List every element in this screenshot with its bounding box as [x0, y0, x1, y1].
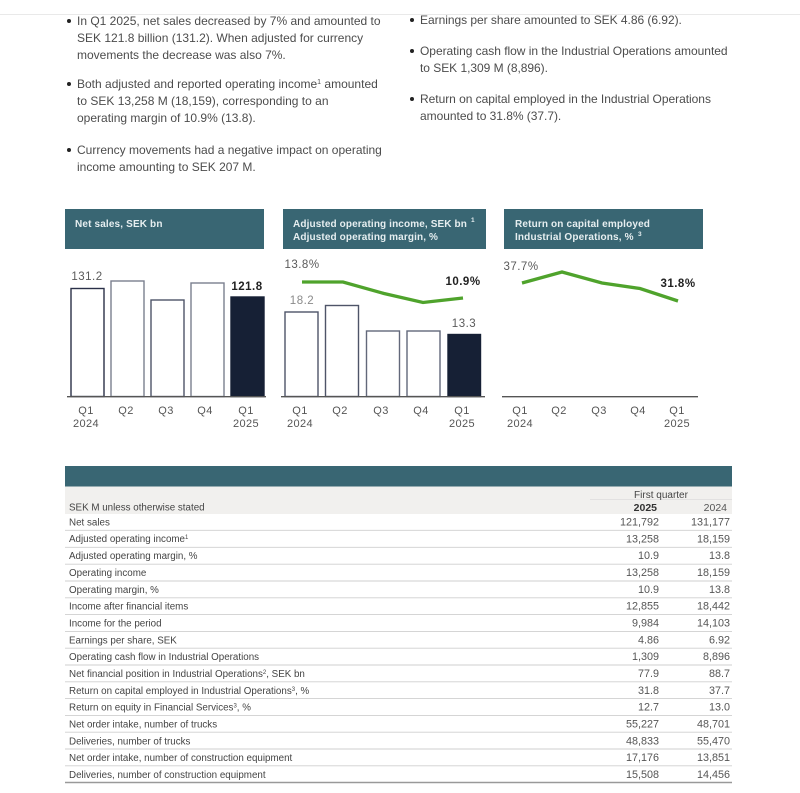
- column 2024 values: 18,159: [697, 567, 730, 579]
- axis labels: net sales: Q4: [197, 405, 213, 417]
- chart: adjusted operating income: [281, 209, 486, 430]
- row labels: [69, 518, 310, 781]
- axis labels: return on capital employed: Q2: [551, 405, 567, 417]
- row labels: Return on equity in Financial Services: [69, 702, 233, 714]
- value labels: return on capital employed: [503, 261, 696, 290]
- chart header: net sales: Net sales, SEK bn: [75, 219, 163, 230]
- bullet: return on capital: [420, 91, 711, 125]
- column 2025 values: 12.7: [638, 702, 659, 714]
- axis labels: return on capital employed: Q1: [669, 405, 685, 417]
- axis labels: adjusted operating income: 2025: [449, 418, 475, 430]
- bullet: net sales: movements the decrease was also 7%.: [77, 48, 286, 62]
- chart: return on capital employed: [502, 209, 703, 430]
- column 2025 values: 10.9: [638, 584, 659, 596]
- column 2025 values: 31.8: [638, 685, 659, 697]
- column 2024 values: 14,103: [697, 618, 730, 630]
- axis labels: return on capital employed: [507, 405, 690, 430]
- column 2024 values: 88.7: [709, 668, 730, 680]
- row labels: Net order intake, number of trucks: [69, 720, 217, 730]
- row labels: 2: [263, 670, 267, 676]
- row labels: Income after financial items: [69, 602, 188, 612]
- column 2024 values: 14,456: [697, 769, 730, 781]
- column 2025 values: 13,258: [626, 567, 659, 579]
- axis labels: return on capital employed: Q3: [591, 405, 607, 417]
- table title bar: [65, 466, 732, 486]
- bullet: cash flow: Operating cash flow in the Industrial Operations amounted: [420, 44, 728, 58]
- chart: net sales: [65, 209, 266, 430]
- column 2024 values: 18,159: [697, 534, 730, 546]
- row lines: [65, 530, 732, 782]
- value labels: adjusted operating income: 10.9%: [445, 276, 481, 288]
- column 2024 values: 55,470: [697, 736, 730, 748]
- bullet: operating income: Both adjusted and reported operating income1 amounted: [77, 77, 378, 91]
- column 2024 values: 13.0: [709, 702, 730, 714]
- axis labels: return on capital employed: Q1: [512, 405, 528, 417]
- row labels: Deliveries, number of trucks: [69, 736, 191, 748]
- chart header: net sales: [65, 209, 264, 249]
- column 2025 values: [620, 516, 659, 781]
- column 2025 values: 10.9: [638, 550, 659, 562]
- chart header: adjusted operating income: [283, 209, 486, 249]
- row labels: , SEK bn: [266, 669, 305, 680]
- chart header: adjusted operating income: Adjusted operating margin, %: [293, 232, 438, 243]
- bullet: currency: income amounting to SEK 207 M.: [77, 160, 256, 174]
- chart header: return on capital employed: Industrial Operations, %: [515, 232, 634, 243]
- column 2025 values: 13,258: [626, 534, 659, 546]
- column 2025 values: 17,176: [626, 752, 659, 764]
- column 2024 values: 8,896: [703, 651, 730, 663]
- axis labels: adjusted operating income: [287, 405, 475, 430]
- chart header: adjusted operating income: 1: [471, 217, 475, 224]
- row labels: , %: [237, 702, 251, 714]
- bars: net sales: [71, 281, 264, 396]
- value labels: adjusted operating income: 13.3: [452, 318, 476, 330]
- bullet: currency: Currency movements had a negative impact on operating: [77, 143, 382, 157]
- axis labels: adjusted operating income: Q4: [413, 405, 429, 417]
- row labels: Net financial position in Industrial Operations: [69, 669, 263, 680]
- column 2024 values: 13.8: [709, 584, 730, 596]
- column 2024 values: 48,701: [697, 718, 730, 730]
- axis labels: adjusted operating income: Q2: [332, 405, 348, 417]
- bullet: net sales: [77, 12, 381, 64]
- column 2025 values: 4.86: [638, 634, 659, 646]
- column 2024 values: 18,442: [697, 600, 730, 612]
- top rule: [0, 14, 800, 15]
- axis labels: net sales: Q2: [118, 405, 134, 417]
- axis labels: net sales: [73, 405, 259, 430]
- column 2024 values: 13,851: [697, 752, 730, 764]
- bars: adjusted operating income: [285, 306, 480, 396]
- row labels: , %: [295, 686, 310, 697]
- column 2025 values: 77.9: [638, 668, 659, 680]
- axis labels: return on capital employed: 2024: [507, 418, 533, 430]
- bullet: return on capital: Return on capital employed in the Industrial Operations: [420, 92, 711, 106]
- bullet: currency: [77, 142, 382, 176]
- value labels: adjusted operating income: 18.2: [290, 295, 314, 307]
- chart header: return on capital employed: [504, 209, 703, 249]
- bullet: net sales: SEK 121.8 billion (131.2). When adjusted for currency: [77, 30, 363, 44]
- axis labels: return on capital employed: 2025: [664, 418, 690, 430]
- column 2025 values: 9,984: [632, 618, 659, 630]
- column 2025 values: 121,792: [620, 516, 659, 528]
- axis labels: adjusted operating income: Q3: [373, 405, 389, 417]
- row labels: Adjusted operating margin, %: [69, 551, 198, 562]
- row labels: Deliveries, number of construction equipment: [69, 770, 266, 781]
- axis labels: net sales: Q3: [158, 405, 174, 417]
- bullet: operating income: to SEK 13,258 M (18,159), corresponding to an: [77, 94, 328, 108]
- value labels: return on capital employed: 31.8%: [660, 278, 696, 290]
- bullet: cash flow: [420, 43, 728, 77]
- row labels: Net order intake, number of construction equipment: [69, 753, 293, 764]
- row labels: 3: [292, 687, 296, 693]
- axis: net sales: [67, 396, 266, 398]
- value labels: net sales: 131.2: [71, 271, 103, 283]
- column 2024 values: 37.7: [709, 685, 730, 697]
- axis: adjusted operating income: [281, 396, 485, 398]
- value labels: adjusted operating income: [284, 259, 481, 330]
- chart header: return on capital employed: 3: [638, 231, 642, 238]
- row labels: Income for the period: [69, 618, 162, 630]
- axis labels: net sales: Q1: [238, 405, 254, 417]
- table header: [65, 486, 732, 514]
- table: [65, 466, 732, 782]
- column 2025 values: 55,227: [626, 718, 659, 730]
- axis labels: return on capital employed: Q4: [630, 405, 646, 417]
- column 2025 values: 48,833: [626, 736, 659, 748]
- value labels: net sales: [71, 271, 263, 293]
- bullet: operating income: operating margin of 10.9% (13.8).: [77, 111, 256, 125]
- column 2025 values: 1,309: [632, 651, 659, 663]
- table header: 2025: [634, 502, 657, 514]
- column 2025 values: 12,855: [626, 600, 659, 612]
- row labels: Return on capital employed in Industrial Operations: [69, 686, 292, 697]
- axis labels: net sales: 2025: [233, 418, 259, 430]
- row labels: 1: [185, 535, 189, 541]
- table header: First quarter: [634, 490, 689, 501]
- chart header: return on capital employed: Return on capital employed: [515, 219, 650, 230]
- bullet: operating income: [77, 76, 378, 127]
- column 2024 values: 6.92: [709, 634, 730, 646]
- bullet: return on capital: amounted to 31.8% (37.7).: [420, 109, 561, 123]
- column 2024 values: 13.8: [709, 550, 730, 562]
- table header: 2024: [704, 502, 727, 514]
- axis labels: adjusted operating income: Q1: [454, 405, 470, 417]
- row labels: Operating income: [69, 568, 147, 579]
- axis labels: net sales: Q1: [78, 405, 94, 417]
- column 2024 values: [691, 516, 730, 781]
- value labels: adjusted operating income: 13.8%: [284, 259, 320, 271]
- axis labels: net sales: 2024: [73, 418, 99, 430]
- chart header: adjusted operating income: Adjusted operating income, SEK bn: [293, 219, 467, 230]
- value labels: return on capital employed: 37.7%: [503, 261, 539, 273]
- axis labels: adjusted operating income: Q1: [292, 405, 308, 417]
- row labels: Earnings per share, SEK: [69, 636, 177, 646]
- row labels: Adjusted operating income: [69, 534, 185, 545]
- table header: SEK M unless otherwise stated: [69, 502, 205, 514]
- value labels: net sales: 121.8: [231, 281, 263, 293]
- return line: [522, 272, 678, 301]
- row labels: Operating margin, %: [69, 585, 159, 596]
- bullet: earnings per share: Earnings per share amounted to SEK 4.86 (6.92).: [420, 13, 682, 27]
- column 2024 values: 131,177: [691, 516, 730, 528]
- axis: return on capital employed: [502, 396, 698, 398]
- bullet: net sales: In Q1 2025, net sales decreased by 7% and amounted to: [77, 14, 381, 28]
- column 2025 values: 15,508: [626, 769, 659, 781]
- row labels: Net sales: [69, 518, 110, 528]
- row labels: 3: [233, 704, 237, 710]
- bullet: cash flow: to SEK 1,309 M (8,896).: [420, 61, 548, 75]
- margin line: [302, 282, 463, 302]
- row labels: Operating cash flow in Industrial Operations: [69, 652, 259, 663]
- axis labels: adjusted operating income: 2024: [287, 418, 313, 430]
